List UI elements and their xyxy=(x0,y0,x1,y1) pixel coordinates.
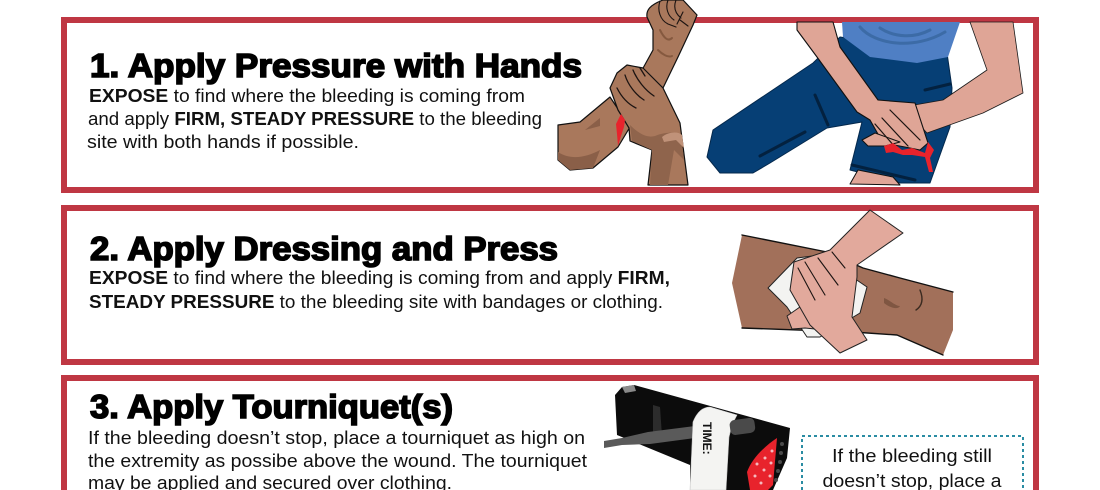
windlass rod xyxy=(604,426,695,448)
wounded dark arm xyxy=(732,235,953,355)
shirt xyxy=(842,22,960,63)
text block: step 3 description: If the bleeding doesn’t stop, place a tourniquet as high on xyxy=(88,428,585,448)
panel: step 2 frame xyxy=(64,208,1036,362)
text block: step 2 description: STEADY PRESSURE to the bleeding site with bandages or clothing. xyxy=(89,292,663,312)
text block: step 2 description xyxy=(89,268,670,312)
text block: step 1 description xyxy=(87,86,542,152)
jeans xyxy=(707,37,952,183)
tag label: TIME: xyxy=(700,422,714,455)
upper hand and forearm xyxy=(790,210,903,353)
callout: second tourniquet advice xyxy=(802,436,1023,490)
heading: step 3: 3. Apply Tourniquet(s) xyxy=(90,388,453,425)
rod end cap xyxy=(729,417,756,436)
strap body xyxy=(615,385,790,490)
heading: step 2: 2. Apply Dressing and Press xyxy=(90,230,558,267)
gripping hand xyxy=(610,65,688,185)
white time tag xyxy=(690,407,737,490)
far arm xyxy=(903,22,1023,133)
callout: second tourniquet advice: If the bleeding still xyxy=(832,446,992,466)
icon: tourniquet xyxy=(604,385,790,490)
text block: step 1 description: and apply FIRM, STEADY PRESSURE to the bleeding xyxy=(88,109,542,129)
panel: step 3 frame xyxy=(64,378,1036,490)
lower hand fingers xyxy=(862,133,900,146)
text block: step 1 description: site with both hands if possible. xyxy=(87,132,359,152)
cloth dressing xyxy=(768,255,867,337)
lower hand fingers xyxy=(787,300,825,330)
dots on strap xyxy=(754,450,774,484)
near arm and hand xyxy=(797,22,928,150)
red tip with dots xyxy=(747,438,777,490)
blood xyxy=(616,114,625,146)
icon: hand gripping wounded arm xyxy=(558,0,697,185)
wounded arm xyxy=(558,97,630,170)
bare thigh xyxy=(850,170,900,185)
text block: step 3 description: the extremity as possibe above the wound. The tourniquet xyxy=(88,451,587,471)
icon: hands pressing dressing on arm xyxy=(732,210,953,355)
blood xyxy=(884,142,934,172)
icon: person pressing on thigh wound xyxy=(707,22,1023,185)
text block: step 1 description: EXPOSE to find where the bleeding is coming from xyxy=(89,86,525,106)
panel: step 1 frame xyxy=(64,20,1036,190)
raised forearm and fist xyxy=(642,0,697,88)
text block: step 3 description xyxy=(88,428,587,490)
heading: step 1: 1. Apply Pressure with Hands xyxy=(90,47,582,84)
text block: step 2 description: EXPOSE to find where the bleeding is coming from and apply FIRM, xyxy=(89,268,670,288)
